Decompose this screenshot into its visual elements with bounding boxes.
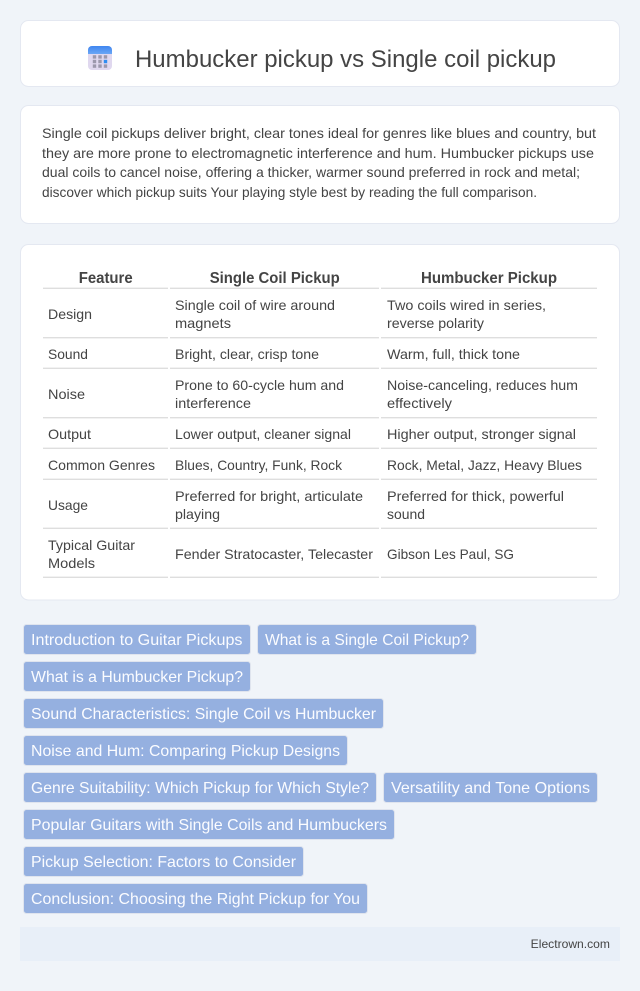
row: usage: Usage xyxy=(48,497,88,513)
tag: versatility xyxy=(384,772,598,802)
tag: pickup selection: Pickup Selection: Factors to Consider xyxy=(31,854,297,871)
row: sound: Bright, clear, crisp tone xyxy=(175,346,319,362)
row: design: Design xyxy=(48,306,92,322)
row: sound xyxy=(48,346,520,362)
row: noise: effectively xyxy=(387,395,452,411)
intro text: Single coil pickups deliver bright, clear tones ideal for genres like blues and country, but xyxy=(42,125,596,141)
tag: sound characteristics: Sound Characteristics: Single Coil vs Humbucker xyxy=(31,706,377,723)
row: typical guitar models xyxy=(48,537,514,571)
row: output: Output xyxy=(48,426,91,442)
row: usage xyxy=(48,488,564,522)
tag: single coil: What is a Single Coil Pickup? xyxy=(265,632,469,649)
panel: topic tags xyxy=(24,624,598,914)
icon: calendar xyxy=(88,46,112,70)
tag: conclusion xyxy=(24,884,368,914)
row: output: Lower output, cleaner signal xyxy=(175,426,351,442)
row: noise xyxy=(48,377,578,411)
row: usage: Preferred for thick, powerful xyxy=(387,488,564,504)
row: noise: Prone to 60-cycle hum and xyxy=(175,377,344,393)
table header row: Feature xyxy=(79,270,133,287)
row: design: reverse polarity xyxy=(387,315,484,331)
row: design: Two coils wired in series, xyxy=(387,297,546,313)
row: usage: sound xyxy=(387,506,425,522)
tag: noise and hum xyxy=(24,736,348,766)
tag: pickup selection xyxy=(24,846,304,876)
row: noise: interference xyxy=(175,395,251,411)
panel: comparison table xyxy=(20,244,620,600)
tag: noise and hum: Noise and Hum: Comparing Pickup Designs xyxy=(31,743,340,760)
panel: introduction xyxy=(20,106,620,224)
tag: versatility: Versatility and Tone Options xyxy=(391,780,590,797)
tag: popular guitars xyxy=(24,810,394,840)
row: design: Single coil of wire around xyxy=(175,297,335,313)
row: output: Higher output, stronger signal xyxy=(387,426,576,442)
row: typical guitar models: Typical Guitar xyxy=(48,537,135,553)
tag: genre suitability xyxy=(24,772,376,802)
tag: single coil xyxy=(258,624,476,654)
tag: humbucker: What is a Humbucker Pickup? xyxy=(31,669,243,686)
tag: genre suitability: Genre Suitability: Which Pickup for Which Style? xyxy=(31,780,369,797)
row: common genres: Blues, Country, Funk, Rock xyxy=(175,457,343,473)
row: usage: Preferred for bright, articulate xyxy=(175,488,363,504)
tag: introduction: Introduction to Guitar Pickups xyxy=(31,632,242,649)
intro text: dual coils to cancel noise, offering a thicker, warmer sound preferred in rock and metal; xyxy=(42,164,580,180)
row: common genres: Common Genres xyxy=(48,457,155,473)
tag: humbucker xyxy=(24,662,250,692)
table header row: Single Coil Pickup xyxy=(210,270,340,287)
row: typical guitar models: Fender Stratocaster, Telecaster xyxy=(175,546,373,562)
row: noise: Noise xyxy=(48,386,85,402)
footer: Electrown.com xyxy=(531,937,610,951)
tag: conclusion: Conclusion: Choosing the Right Pickup for You xyxy=(31,891,360,908)
intro text: they are more prone to electromagnetic interference and hum. Humbucker pickups use xyxy=(42,145,594,161)
tag: introduction xyxy=(24,624,250,654)
table header row xyxy=(79,270,557,287)
row: design xyxy=(48,297,546,331)
row: common genres xyxy=(48,457,582,473)
row: common genres: Rock, Metal, Jazz, Heavy Blues xyxy=(387,457,582,473)
row: typical guitar models: Gibson Les Paul, SG xyxy=(387,546,514,562)
row: sound: Warm, full, thick tone xyxy=(387,346,520,362)
intro text xyxy=(42,125,596,200)
tag: popular guitars: Popular Guitars with Single Coils and Humbuckers xyxy=(31,817,387,834)
title: Humbucker pickup vs Single coil pickup xyxy=(135,46,556,73)
row: typical guitar models: Models xyxy=(48,555,95,571)
tag: sound characteristics xyxy=(24,698,384,728)
row: sound: Sound xyxy=(48,346,88,362)
row: output xyxy=(48,426,576,442)
intro text: discover which pickup suits Your playing style best by reading the full comparison. xyxy=(42,184,537,200)
row: design: magnets xyxy=(175,315,231,331)
row: usage: playing xyxy=(175,506,220,522)
panel: header xyxy=(20,20,620,86)
row: noise: Noise-canceling, reduces hum xyxy=(387,377,578,393)
table header row: Humbucker Pickup xyxy=(421,270,557,287)
footer xyxy=(20,927,620,961)
